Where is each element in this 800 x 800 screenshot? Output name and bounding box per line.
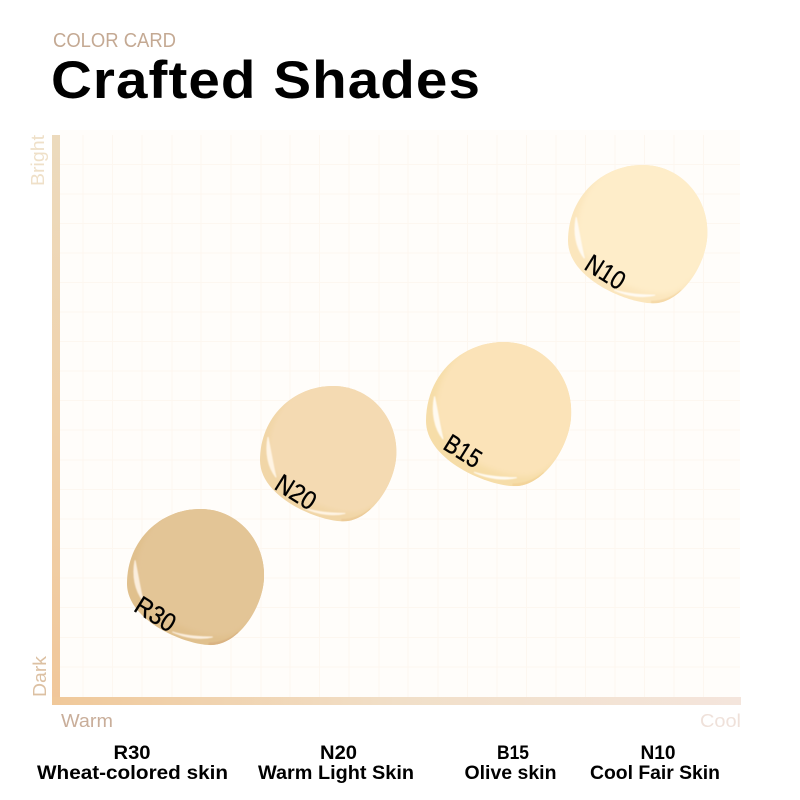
swatch label: R30: R30 <box>129 590 182 638</box>
shade caption: N20: Warm Light Skin <box>258 763 414 784</box>
shade caption: N10: N10 <box>640 743 676 764</box>
swatch label: B15: B15 <box>439 428 487 474</box>
swatch: B15 <box>426 342 572 486</box>
chart panel with grid <box>60 130 740 697</box>
axis label: Warm: Warm <box>61 711 113 731</box>
swatch label: N10: N10 <box>580 248 631 296</box>
shade caption: N10 <box>590 743 720 784</box>
shade caption: B15 <box>464 743 556 784</box>
shade caption: R30: Wheat-colored skin <box>37 763 228 784</box>
axis label: Bright: Bright <box>28 135 48 186</box>
vertical axis bar: bright to dark <box>52 135 60 705</box>
shade caption: R30: R30 <box>114 743 150 764</box>
title: Crafted Shades <box>51 51 481 110</box>
eyebrow: color card: COLOR CARD <box>53 30 176 52</box>
shade caption: N10: Cool Fair Skin <box>590 763 720 784</box>
shade caption: N20: N20 <box>320 743 357 764</box>
swatch label: N20: N20 <box>270 468 322 516</box>
swatch: N10 <box>568 165 708 304</box>
shade caption: N20 <box>258 743 414 784</box>
horizontal axis bar: warm to cool <box>52 697 741 705</box>
axis label: Cool: Cool <box>700 711 741 731</box>
swatch: R30 <box>127 509 264 646</box>
shade caption: B15: Olive skin <box>464 763 556 784</box>
shade caption: R30 <box>37 743 228 784</box>
shade caption: B15: B15 <box>497 743 529 764</box>
swatch: N20 <box>260 386 396 522</box>
axis label: Dark: Dark <box>30 655 50 697</box>
